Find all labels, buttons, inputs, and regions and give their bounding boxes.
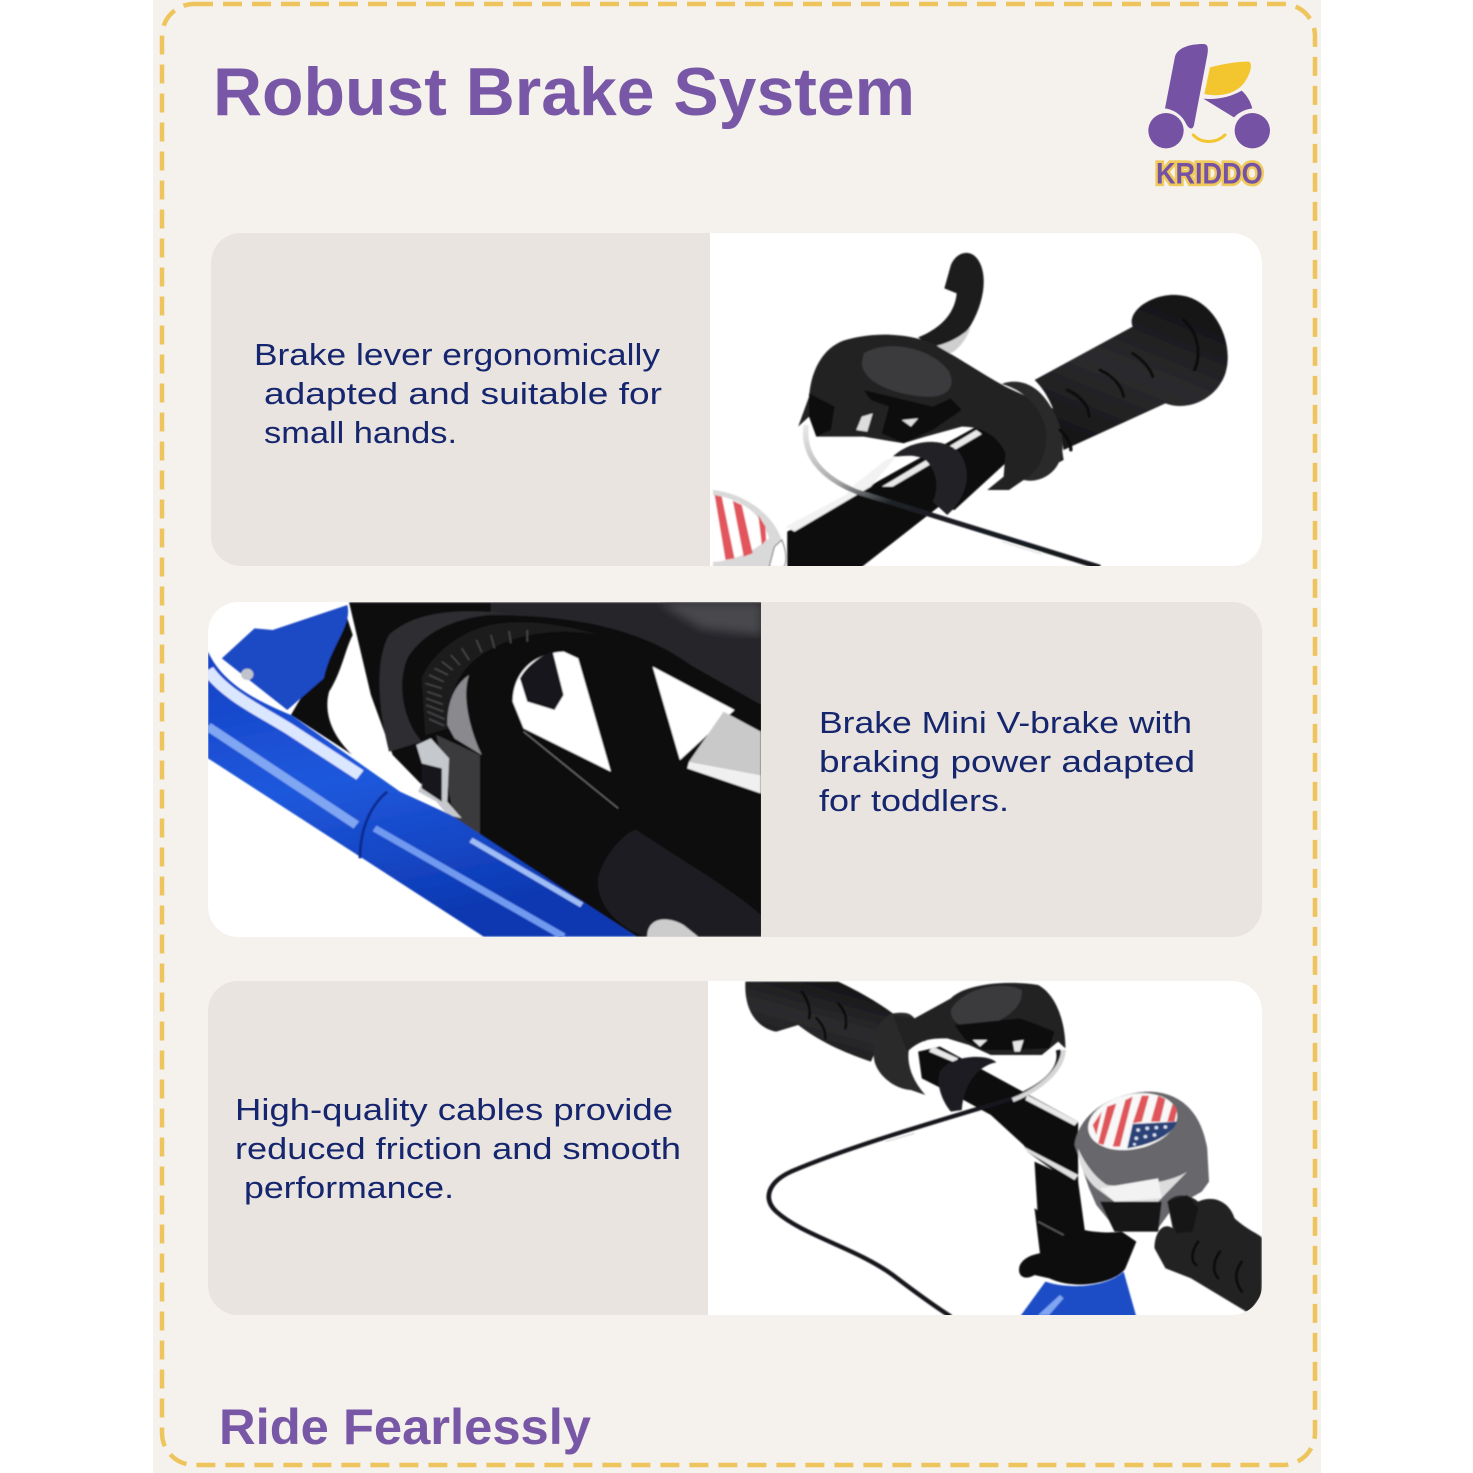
stem (1035, 1162, 1085, 1235)
handlebar (918, 1047, 1078, 1188)
text: brake lever: small hands. (264, 415, 457, 450)
text: brake lever: Brake lever ergonomically (254, 337, 661, 372)
white gaps (344, 745, 352, 755)
text: v-brake: braking power adapted (819, 744, 1195, 779)
text: brake lever (254, 337, 662, 450)
velcro strap (939, 1057, 996, 1112)
photo: mini v-brake (208, 602, 762, 937)
bell edge (713, 490, 786, 567)
panel 1: brake lever (211, 233, 1262, 568)
logo: Kriddo (1148, 44, 1270, 190)
text: v-brake: for toddlers. (819, 783, 1009, 818)
text: cables (235, 1092, 681, 1205)
brake cable (806, 425, 1100, 567)
text: cables: reduced friction and smooth (235, 1131, 681, 1166)
grip (745, 982, 893, 1062)
panel 3: cables (208, 981, 1262, 1317)
tyre tread (425, 630, 527, 726)
text: v-brake: Brake Mini V-brake with (819, 705, 1192, 740)
rubber arm (447, 675, 482, 755)
title: Robust Brake System (213, 54, 915, 130)
text: brake lever: adapted and suitable for (264, 376, 662, 411)
brake pad clip (416, 738, 462, 818)
blue frame (1020, 1272, 1136, 1317)
wheel hub (598, 830, 761, 937)
photo: brake lever and grip (710, 233, 1262, 568)
background panel (153, 0, 1321, 1473)
panel 2: mini v-brake (208, 602, 1262, 937)
blue frame (222, 605, 348, 710)
dashed border (162, 4, 1315, 1465)
text: v-brake (819, 705, 1195, 818)
bell (1075, 1084, 1209, 1232)
text: cables: High-quality cables provide (235, 1092, 673, 1127)
photo: cables and bell (708, 981, 1262, 1317)
bell lever and right grip (1154, 1195, 1262, 1313)
footer tagline: Ride Fearlessly (219, 1399, 591, 1455)
logo: Kriddo: KRIDDO (1156, 157, 1263, 190)
brake cable (769, 1050, 1059, 1317)
text: cables: performance. (244, 1170, 454, 1205)
velcro strap (893, 442, 967, 515)
